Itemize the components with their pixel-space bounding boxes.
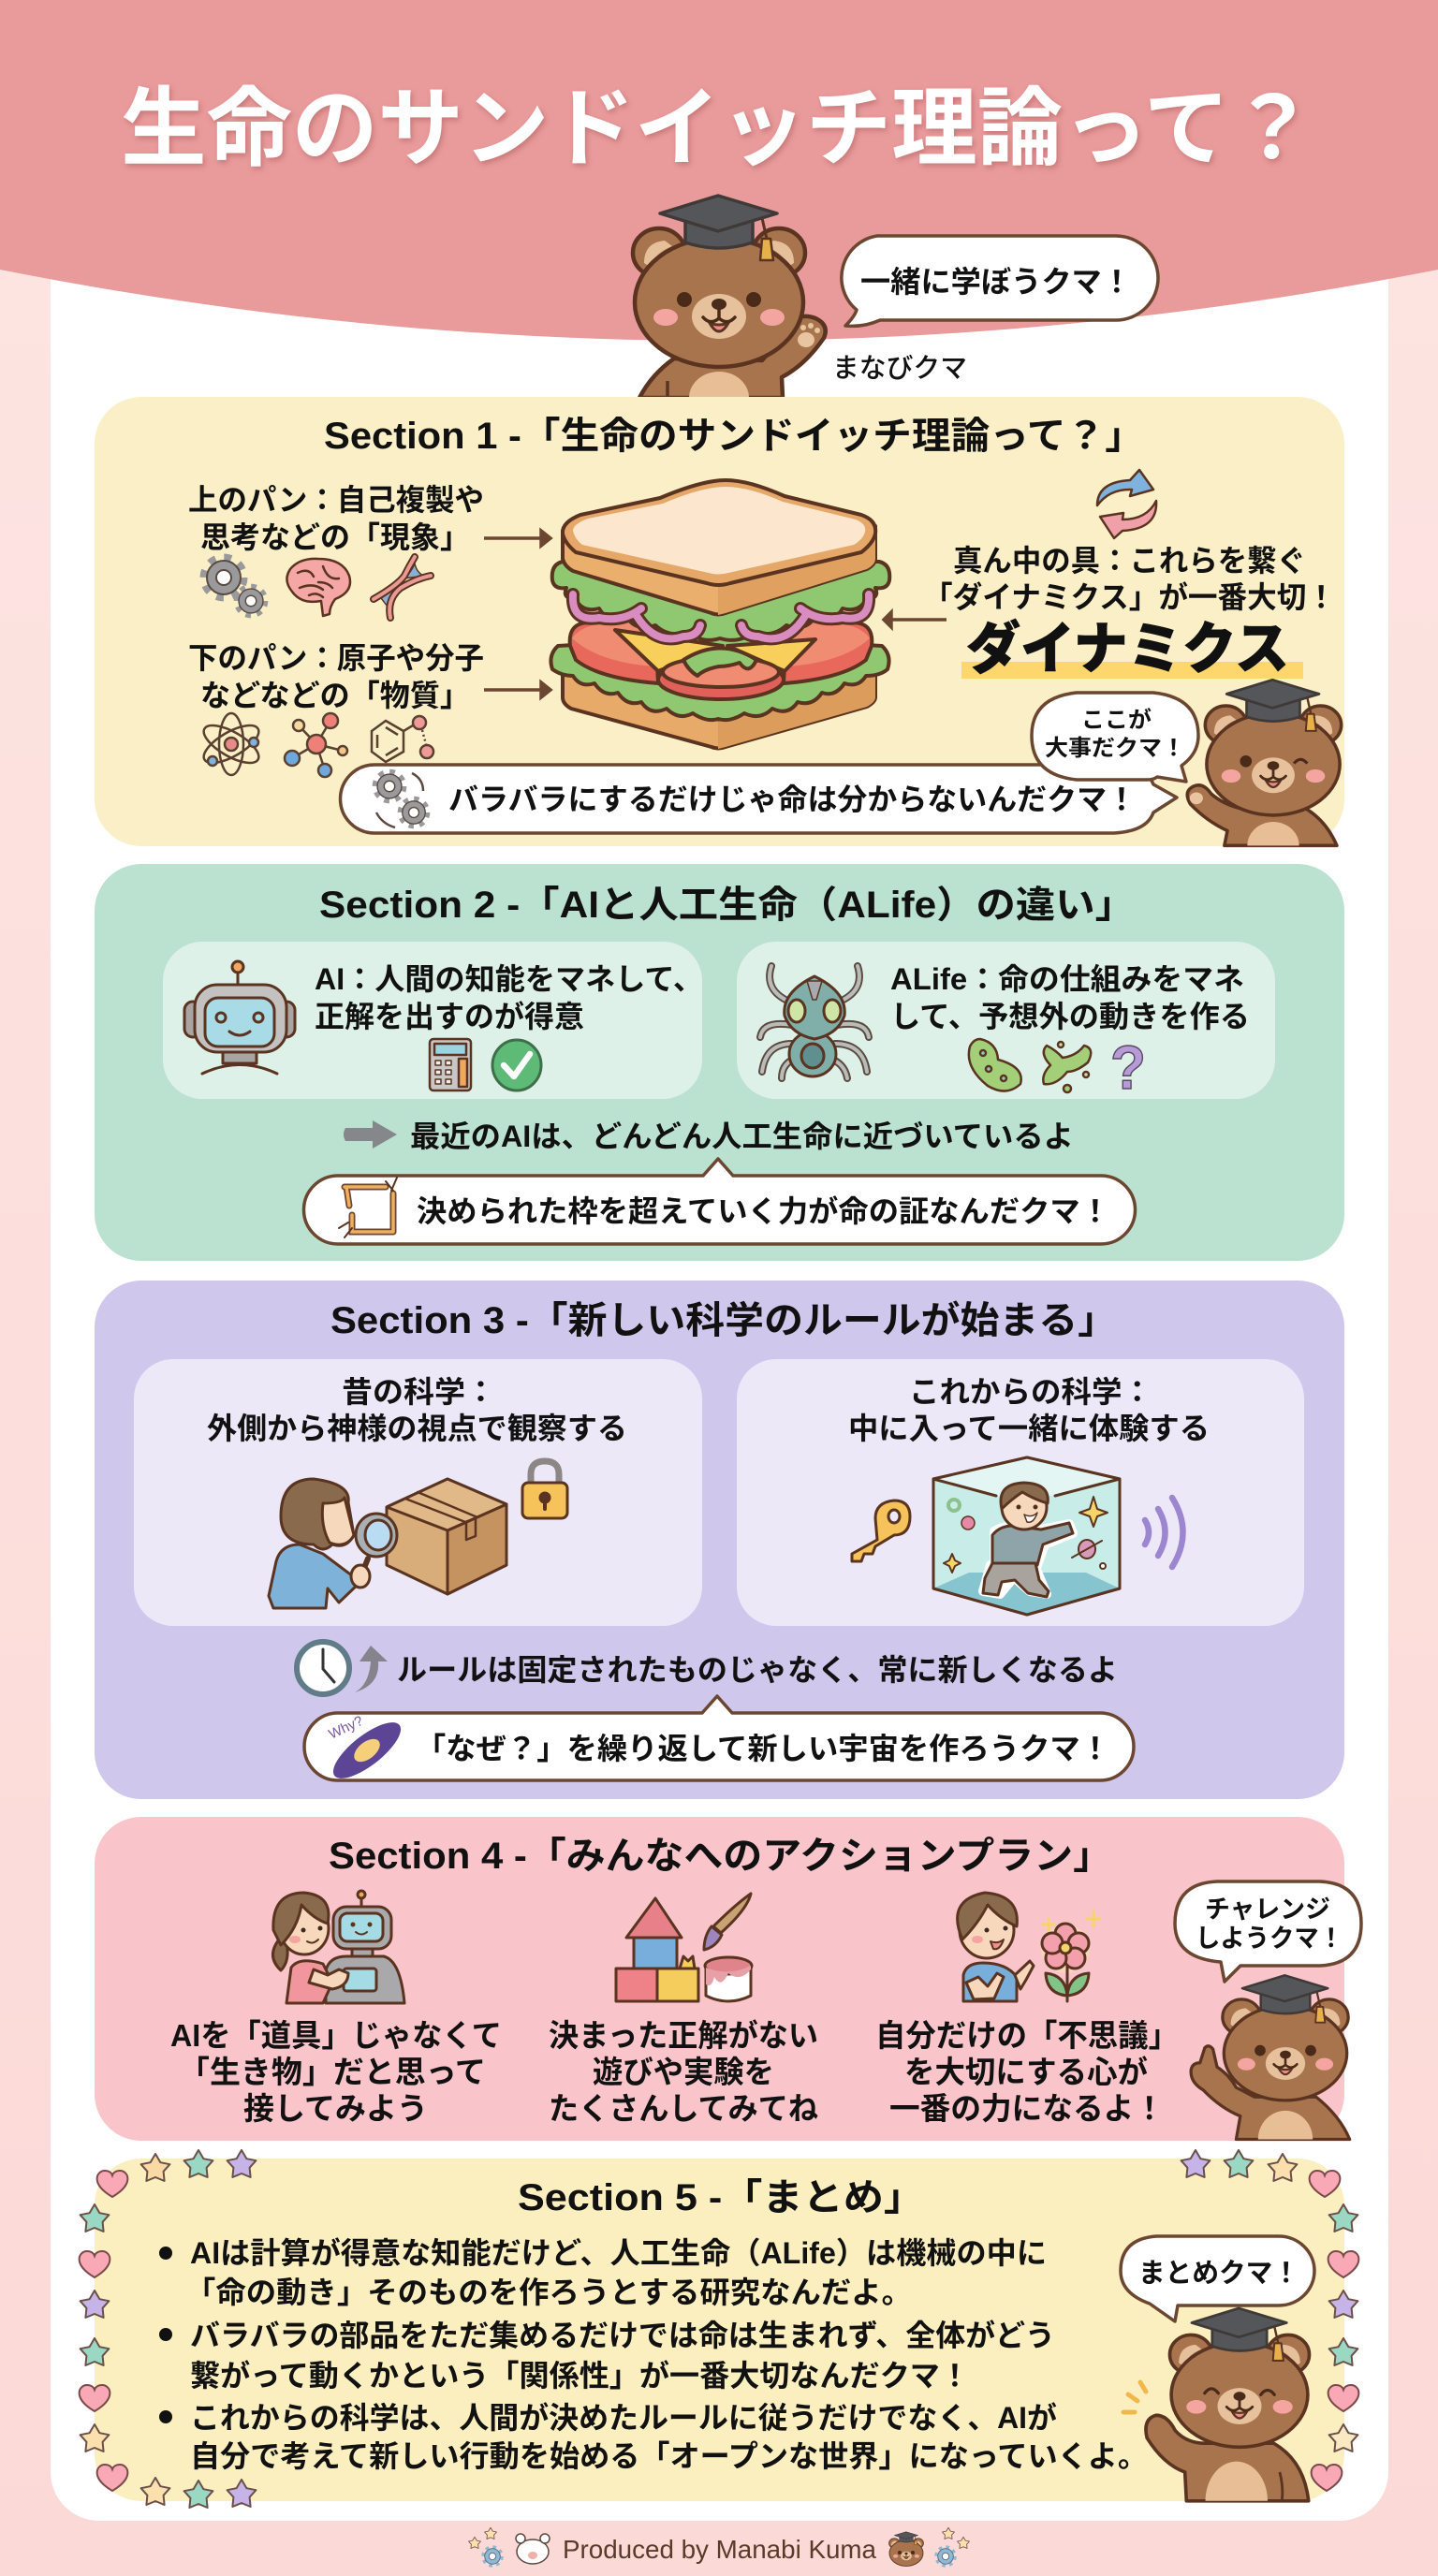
speech bubble: section 4	[1175, 1881, 1361, 1982]
text: action 2: 遊びや実験を	[593, 2055, 774, 2089]
arrow: bottom bread	[484, 682, 550, 697]
heading: section 3: Section 3 -「新しい科学のルールが始まる」	[330, 1300, 1117, 1341]
panel: section 1	[95, 397, 1344, 846]
text: action 1: AIを「道具」じゃなくて	[170, 2018, 502, 2053]
icon: up arrow	[355, 1646, 388, 1692]
text: action 3: 自分だけの「不思議」	[875, 2018, 1179, 2053]
text: action 2	[549, 2018, 818, 2126]
icon: galaxy	[325, 1713, 409, 1788]
speech bubble: section 1: ここが	[1081, 707, 1152, 733]
icon: clock	[297, 1642, 349, 1694]
text: filling	[923, 544, 1336, 614]
text: action 3	[875, 2018, 1179, 2126]
text: bottom bread: 下のパン：原子や分子	[188, 641, 484, 675]
speech bubble: section 1	[1032, 693, 1198, 782]
footer icons right	[889, 2527, 969, 2566]
text: AI: AI：人間の知能をマネして、	[315, 962, 703, 996]
mascot: header bear	[633, 196, 826, 398]
icon: check mark	[492, 1040, 541, 1090]
icon: key	[852, 1500, 910, 1561]
icon: sound waves	[1145, 1498, 1183, 1567]
callout: section 2: 決められた枠を超えていく力が命の証なんだクマ！	[417, 1194, 1110, 1228]
keyword highlight	[961, 662, 1303, 679]
icon: blob	[1043, 1042, 1091, 1092]
bullet list: バラバラの部品をただ集めるだけでは命は生まれず、全体がどう	[190, 2319, 1055, 2352]
icon: calculator	[430, 1039, 471, 1090]
text: new science: 中に入って一緒に体験する	[848, 1412, 1210, 1445]
callout: section 3: 「なぜ？」を繰り返して新しい宇宙を作ろうクマ！	[416, 1732, 1110, 1765]
icon: cycle arrows	[1097, 470, 1156, 538]
mascot: section 5 bear	[1146, 2308, 1310, 2501]
speech bubble: header: 一緒に学ぼうクマ！	[860, 265, 1132, 299]
text: section 2 note: 最近のAIは、どんどん人工生命に近づいているよ	[410, 1120, 1074, 1153]
text: top bread: 思考などの「現象」	[200, 520, 470, 554]
speech bubble: section 4: しようクマ！	[1196, 1925, 1343, 1953]
icon: question mark: ?	[1110, 1032, 1146, 1102]
text: top bread: 上のパン：自己複製や	[188, 483, 484, 517]
speech bubble: header	[842, 236, 1158, 326]
bullet list: AIは計算が得意な知能だけど、人工生命（ALife）は機械の中に	[190, 2236, 1047, 2270]
header band	[0, 0, 1438, 341]
text: action 3: 一番の力になるよ！	[889, 2091, 1165, 2126]
text: AI	[315, 962, 703, 1033]
heading: section 5: Section 5 -「まとめ」	[518, 2177, 924, 2218]
text: action 1: 接してみよう	[243, 2091, 428, 2126]
text: filling: 真ん中の具：これらを繋ぐ	[953, 544, 1306, 578]
speech bubble: section 1: 大事だクマ！	[1045, 736, 1185, 761]
mascot: section 1 bear	[1187, 680, 1342, 845]
speech bubble: section 4: チャレンジ	[1205, 1895, 1330, 1924]
bullet list: これからの科学は、人間が決めたルールに従うだけでなく、AIが	[190, 2401, 1057, 2435]
text: old science: 昔の科学：	[342, 1375, 496, 1409]
icon: benzene	[372, 716, 433, 762]
illustration: cardboard box	[387, 1479, 506, 1594]
icon: atom	[198, 713, 264, 775]
icon: robot	[184, 961, 295, 1074]
text: section 3 note: ルールは固定されたものじゃなく、常に新しくなるよ	[397, 1653, 1118, 1687]
text: action 2: たくさんしてみてね	[549, 2091, 818, 2126]
illustration: child with flower	[958, 1893, 1100, 2001]
decorative border: stars and hearts	[80, 2150, 1358, 2508]
card: old science	[134, 1359, 702, 1626]
arrow: filling	[884, 612, 946, 627]
bullet list: 繋がって動くかという「関係性」が一番大切なんだクマ！	[190, 2359, 970, 2393]
text: new science: これからの科学：	[909, 1375, 1152, 1409]
text: old science: 外側から神様の視点で観察する	[207, 1412, 627, 1445]
text: action 1: 「生き物」だと思って	[179, 2055, 486, 2089]
keyword: dynamics: ダイナミクス	[966, 618, 1289, 681]
callout: section 1: バラバラにするだけじゃ命は分からないんだクマ！	[448, 783, 1137, 816]
text: filling: 「ダイナミクス」が一番大切！	[923, 580, 1336, 614]
panel: section 4	[95, 1817, 1361, 2141]
text: action 1	[170, 2018, 502, 2126]
speech bubble: section 5: まとめクマ！	[1138, 2259, 1299, 2289]
card: AI	[163, 942, 703, 1099]
text: bottom bread: などなどの「物質」	[200, 679, 470, 712]
icon: gears	[203, 557, 266, 616]
bullet list: 自分で考えて新しい行動を始める「オープンな世界」になっていくよ。	[190, 2439, 1148, 2473]
footer	[469, 2527, 969, 2566]
mascot: section 4 bear	[1191, 1975, 1350, 2140]
text: action 3: を大切にする心が	[904, 2055, 1148, 2089]
arrow: top bread	[484, 531, 550, 546]
icon: gray arrow	[344, 1120, 397, 1149]
illustration: observer with magnifier	[269, 1479, 397, 1608]
heading: section 4: Section 4 -「みんなへのアクションプラン」	[329, 1836, 1112, 1877]
text: ALife	[890, 962, 1250, 1033]
text: top bread	[188, 483, 484, 554]
card: ALife	[737, 942, 1275, 1102]
illustration: child inside cube	[933, 1457, 1120, 1615]
icon: molecule	[285, 713, 347, 777]
illustration: sandwich	[550, 480, 889, 749]
panel: section 2	[95, 864, 1344, 1261]
icon: lock	[522, 1461, 567, 1518]
bullet list: 「命の動き」そのものを作ろうとする研究なんだよ。	[185, 2276, 912, 2309]
heading: section 2: Section 2 -「AIと人工生命（ALife）の違い」	[319, 885, 1135, 926]
text: ALife: して、予想外の動きを作る	[890, 1000, 1250, 1033]
text: AI: 正解を出すのが得意	[315, 1000, 584, 1033]
icon: amoeba	[969, 1039, 1021, 1091]
bear name label: まなびクマ	[832, 353, 967, 384]
title: 生命のサンドイッチ理論って？	[121, 81, 1315, 177]
icon: galaxy: Why?	[327, 1713, 365, 1743]
illustration: blocks and brush	[616, 1894, 752, 2001]
panel: section 3	[95, 1281, 1344, 1799]
icon: broken frame	[339, 1178, 397, 1237]
illustration: child with robot	[272, 1891, 404, 2003]
text: bottom bread	[188, 641, 484, 712]
text: new science	[848, 1375, 1210, 1445]
text: old science	[207, 1375, 627, 1445]
panel: section 5	[80, 2150, 1358, 2508]
icon: brain	[286, 559, 350, 616]
footer credit: Produced by Manabi Kuma	[563, 2535, 876, 2564]
callout: section 2	[303, 1159, 1135, 1244]
heading: section 1: Section 1 -「生命のサンドイッチ理論って？」	[324, 416, 1144, 457]
bullet list	[159, 2236, 1148, 2473]
footer icons left	[469, 2527, 550, 2566]
callout: section 1	[341, 765, 1177, 833]
speech bubble: section 5	[1121, 2236, 1314, 2321]
text: action 2: 決まった正解がない	[549, 2018, 818, 2053]
icon: DNA	[374, 557, 431, 618]
icon: artificial bug	[760, 966, 869, 1078]
sparkle marks	[1123, 2382, 1146, 2412]
text: ALife: ALife：命の仕組みをマネ	[890, 962, 1244, 996]
card: new science	[737, 1359, 1304, 1626]
callout: section 3	[304, 1696, 1134, 1788]
